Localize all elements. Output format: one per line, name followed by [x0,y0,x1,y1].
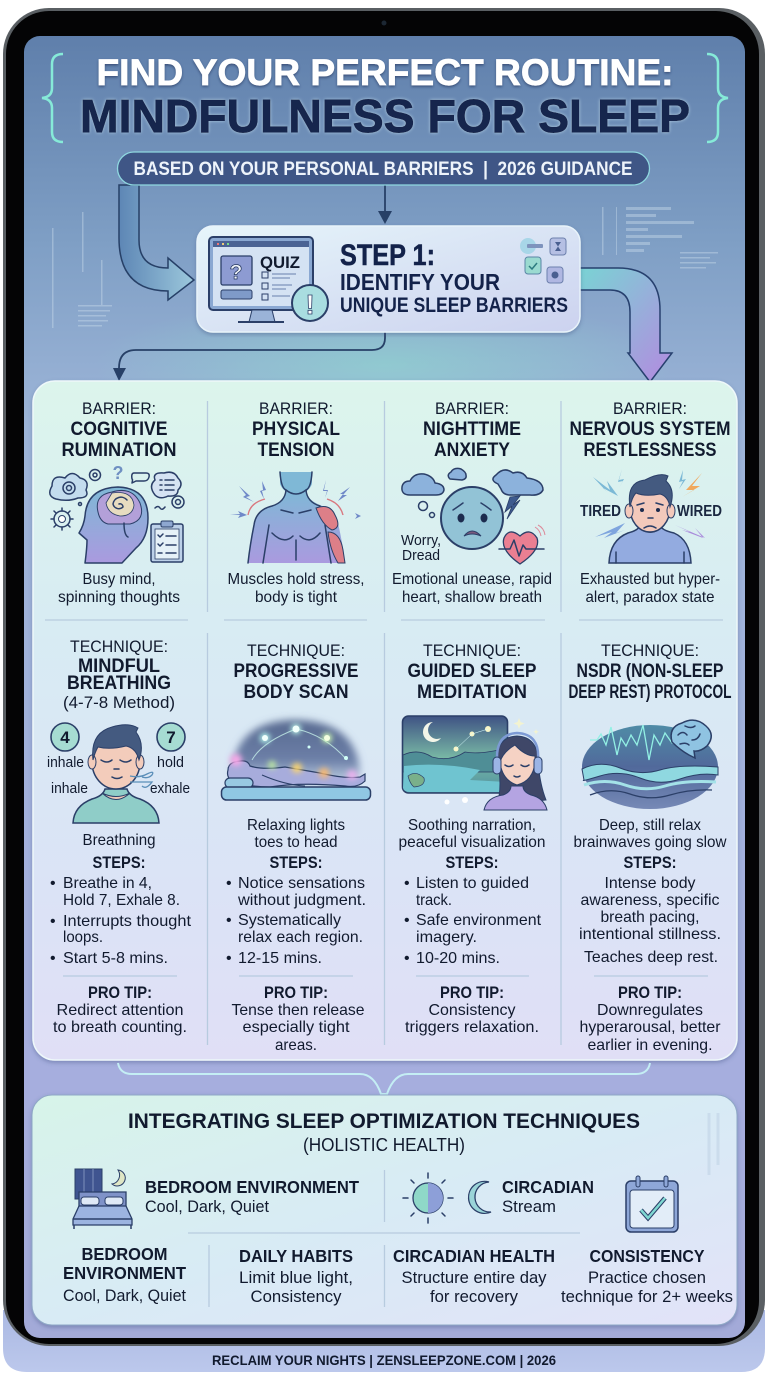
circadian label [502,1177,594,1216]
caption: peaceful visualization [398,834,546,851]
steps: STEPS: [270,854,322,872]
icon: brainwaves and brain [582,720,718,809]
caption [398,817,546,851]
icon: person breathing: inhale [47,754,84,771]
caption: Breathning [82,832,156,849]
heading: TECHNIQUE: [601,641,699,660]
steps: STEPS: [446,854,498,872]
icon: quiz monitor: QUIZ [260,253,300,272]
barrier: cognitive rumination [50,399,184,606]
pro tip: Downregulates [597,1002,703,1019]
pro tip: PRO TIP: [618,984,682,1002]
circadian label: Stream [502,1197,556,1216]
decorative data panels [52,207,718,328]
steps: Systematically [238,912,341,929]
steps [404,854,542,967]
heading: TECHNIQUE: [247,641,345,660]
connecting brace [118,1063,650,1094]
steps: • [50,913,56,930]
subtitle pill [118,152,650,185]
technique: progressive body scan [222,641,370,1054]
icon: sun and moon [403,1173,491,1223]
panel subheading: (HOLISTIC HEALTH) [303,1135,465,1155]
steps: without judgment. [237,892,366,909]
heading: NERVOUS SYSTEM [570,418,730,440]
arrow head center [378,211,392,224]
description [392,571,552,606]
column: circadian health: CIRCADIAN HEALTH [393,1246,555,1266]
steps: Start 5-8 mins. [63,950,168,967]
caption: Soothing narration, [408,817,536,834]
column: daily habits: Consistency [250,1287,342,1306]
column: bedroom environment: BEDROOM [82,1244,168,1264]
icon: person breathing: exhale [150,780,190,797]
steps: • [50,875,56,892]
caption: Deep, still relax [599,817,701,834]
caption [247,817,345,851]
heading [423,399,521,461]
pro tip: PRO TIP: [440,984,504,1002]
circadian label: CIRCADIAN [502,1177,594,1197]
bedroom environment label [145,1177,359,1216]
technique: nsdr protocol [568,641,732,1054]
arrow: pill to step box thin [384,185,386,212]
heading: BODY SCAN [244,681,348,703]
column: consistency: Practice chosen [588,1268,706,1287]
column: circadian health: for recovery [430,1287,518,1306]
icon: busy mind [50,463,184,563]
icon: woman with headphones and lake scene [402,716,547,810]
pro tip: hyperarousal, better [580,1019,721,1036]
title line 2: MINDFULNESS FOR SLEEP [80,90,690,142]
steps: • [226,912,232,929]
bedroom environment label: Cool, Dark, Quiet [145,1197,269,1216]
steps: 10-20 mins. [416,950,500,967]
pro tip: areas. [275,1037,317,1054]
steps: track. [416,892,452,909]
caption [574,817,727,851]
caption: Relaxing lights [247,817,345,834]
heading [568,641,732,703]
heading: TECHNIQUE: [70,637,168,656]
footer text: RECLAIM YOUR NIGHTS | ZENSLEEPZONE.COM | 2026 [212,1352,556,1368]
pro tip [405,984,539,1036]
icon: tired and wired person [580,469,722,563]
steps: relax each region. [238,929,363,946]
barrier: physical tension [228,399,364,606]
heading: MINDFUL [78,655,160,677]
pro tip [232,984,365,1054]
main panel [33,381,737,1060]
heading: TENSION [258,439,334,461]
heading: PHYSICAL [252,418,340,440]
column: consistency: CONSISTENCY [590,1246,705,1266]
icon: person breathing: hold [157,754,184,771]
step heading: STEP 1: [340,239,435,272]
steps: intentional stillness. [579,926,721,943]
heading: NIGHTTIME [423,418,521,440]
steps: loops. [63,929,103,946]
pro tip [53,984,187,1036]
steps: breath pacing, [600,909,700,926]
icon: quiz monitor [209,237,328,322]
heading: BARRIER: [82,399,156,418]
arrow: pill to step box wide [119,185,194,300]
column: bedroom environment [63,1244,186,1305]
icon: person breathing: inhale [51,780,88,797]
column: daily habits: Limit blue light, [239,1268,353,1287]
barrier: nervous system restlessness [570,399,730,606]
steps [226,854,366,967]
column: consistency: technique for 2+ weeks [561,1287,733,1306]
column dividers [45,401,723,1045]
steps: • [226,950,232,967]
caption: toes to head [254,834,338,851]
description: Muscles hold stress, [228,571,364,588]
description: heart, shallow breath [402,589,542,606]
steps: STEPS: [92,854,146,872]
column: daily habits: DAILY HABITS [239,1246,353,1266]
steps: awareness, specific [580,892,720,909]
pro tip: PRO TIP: [88,984,152,1002]
technique: mindful breathing [47,637,192,1036]
description: alert, paradox state [586,589,715,606]
description: Exhausted but hyper- [580,571,720,588]
icon: person breathing: 7 [166,728,176,747]
pro tip: triggers relaxation. [405,1019,539,1036]
step 1 box [197,226,580,332]
pro tip [580,984,721,1054]
subtitle pill: BASED ON YOUR PERSONAL BARRIERS | 2026 GUIDANCE [134,159,632,180]
heading: TECHNIQUE: [423,641,521,660]
heading: PROGRESSIVE [234,660,358,682]
integration panel [32,1095,737,1325]
heading [252,399,340,461]
title bracket right [707,54,728,142]
heading: NSDR (NON-SLEEP [576,660,724,682]
icon: body scan dome [222,720,370,800]
icon: quiz monitor: ? [230,261,242,284]
panel heading: INTEGRATING SLEEP OPTIMIZATION TECHNIQUES [128,1109,640,1133]
steps [50,854,192,967]
pro tip: Tense then release [232,1002,365,1019]
footer strip [3,1310,765,1372]
icon: person breathing: 4 [60,728,70,747]
icon: worried face with clouds and heart [401,468,545,564]
title [42,51,728,142]
column: daily habits [239,1246,353,1306]
arrow: step box to right panel [578,268,672,382]
steps: Hold 7, Exhale 8. [63,892,180,909]
technique: guided sleep meditation [398,641,547,1036]
heading [234,641,358,703]
description: body is tight [255,589,338,606]
steps: Intense body [604,875,696,892]
steps: Teaches deep rest. [584,949,718,966]
title bracket left [42,54,63,142]
heading: ANXIETY [434,439,510,461]
heading: RUMINATION [62,439,176,461]
pro tip: Redirect attention [56,1002,184,1019]
steps: imagery. [416,929,477,946]
heading: (4-7-8 Method) [63,693,175,712]
heading: BARRIER: [435,399,509,418]
step description [340,269,568,317]
heading [408,641,536,703]
icons: small apps [520,238,566,283]
pro tip: especially tight [242,1019,350,1036]
heading: COGNITIVE [70,418,168,440]
steps: Breathe in 4, [63,875,152,892]
icon: worried face with clouds and heart: Worry, [401,532,441,549]
description: Busy mind, [82,571,156,588]
icon: worried face with clouds and heart: Dread [402,547,440,564]
column: consistency [561,1246,733,1306]
heading: GUIDED SLEEP [408,660,536,682]
title line 1: FIND YOUR PERFECT ROUTINE: [96,51,674,93]
column: bedroom environment: ENVIRONMENT [63,1263,186,1283]
heading: BARRIER: [613,399,687,418]
pro tip: earlier in evening. [588,1037,712,1054]
step description: IDENTIFY YOUR [340,269,500,295]
steps: • [404,912,410,929]
heading [570,399,730,461]
description [580,571,720,606]
column: circadian health: Structure entire day [402,1268,547,1287]
heading [63,637,175,712]
description [228,571,364,606]
barrier: nighttime anxiety [392,399,552,606]
column: circadian health [393,1246,555,1306]
steps: Interrupts thought [63,913,192,930]
icon: bed [73,1169,132,1229]
pro tip: PRO TIP: [264,984,328,1002]
icon: tired and wired person: TIRED [580,503,621,520]
column: bedroom environment: Cool, Dark, Quiet [63,1286,186,1305]
heading: MEDITATION [417,681,527,703]
pro tip: to breath counting. [53,1019,187,1036]
description: spinning thoughts [58,589,180,606]
icon: calendar check [626,1176,678,1232]
heading: BARRIER: [259,399,333,418]
steps: Safe environment [416,912,542,929]
icon: quiz monitor: ! [305,289,315,320]
caption: brainwaves going slow [574,834,727,851]
steps: Notice sensations [238,875,365,892]
icon: tired and wired person: WIRED [677,503,722,520]
icon: busy mind: ? [112,463,124,483]
icon: tense torso [230,472,361,563]
steps: 12-15 mins. [238,950,322,967]
arrow: step box to left panel [113,332,385,381]
steps: Listen to guided [416,875,529,892]
steps: • [50,950,56,967]
pro tip: Consistency [428,1002,516,1019]
step description: UNIQUE SLEEP BARRIERS [340,294,568,317]
heading: RESTLESSNESS [584,439,716,461]
heading: BREATHING [67,672,171,694]
heading [62,399,176,461]
steps: STEPS: [624,854,676,872]
steps: • [404,875,410,892]
description [58,571,180,606]
steps [579,854,721,966]
steps: • [404,950,410,967]
description: Emotional unease, rapid [392,571,552,588]
steps: • [226,875,232,892]
bedroom environment label: BEDROOM ENVIRONMENT [145,1177,359,1197]
icon: person breathing [47,723,190,823]
decorative marks [709,1113,718,1175]
